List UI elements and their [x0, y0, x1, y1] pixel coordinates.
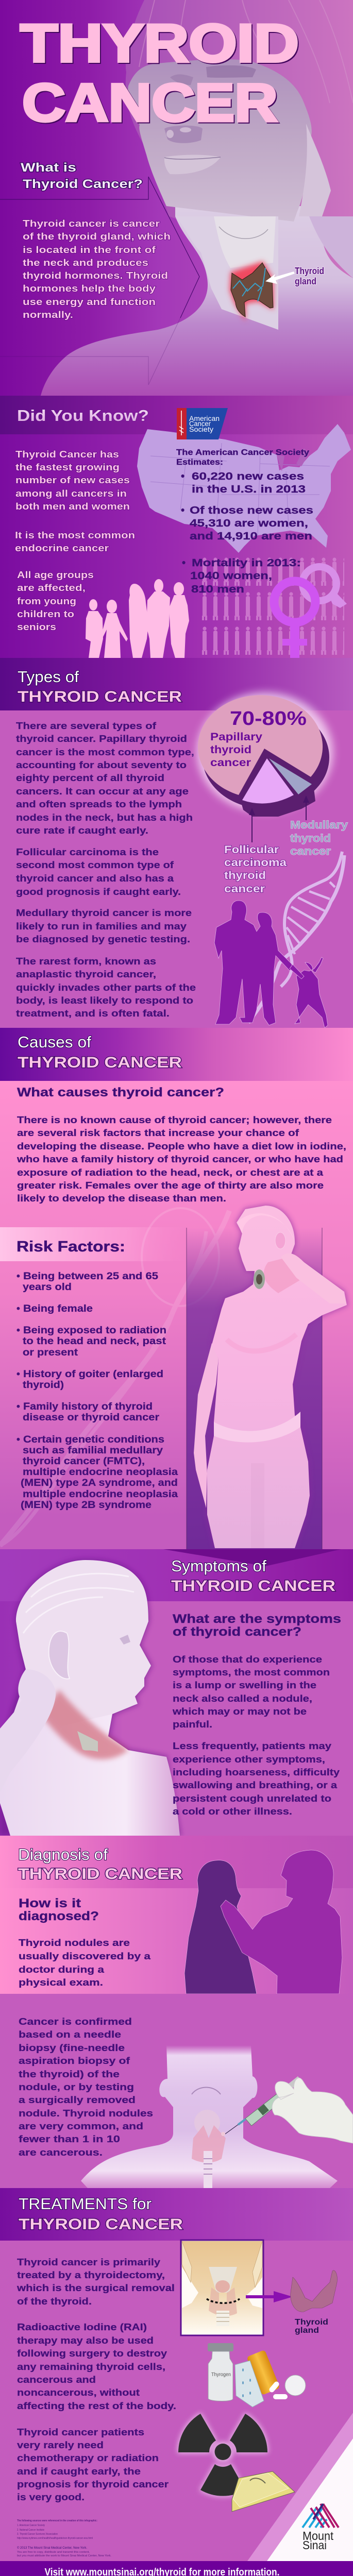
list: risk factors: • [16, 1303, 20, 1314]
text: biopsy explanation: Cancer is confirmed [19, 2016, 132, 2027]
text: American Cancer Society estimates: Estimates: [176, 458, 223, 467]
text: types description: Medullary thyroid cancer is more [16, 907, 192, 918]
text: radioactive iodine: cancerous and [17, 2374, 96, 2385]
panel: biopsy [0, 1994, 353, 2188]
illustration: yellow booklet [232, 2471, 295, 2512]
label: follicular carcinoma: cancer [224, 883, 265, 895]
decoration: faint DNA behind risk list [0, 1208, 229, 1546]
label: thyroid gland: gland [295, 276, 316, 286]
text: copyright [17, 2546, 111, 2557]
heading: what is thyroid cancer [21, 161, 143, 191]
label: thyroid gland: gland [295, 2326, 319, 2335]
text: other symptoms: Less frequently, patients may [173, 1740, 332, 1751]
text: types description [16, 720, 196, 1019]
text: biopsy explanation: aspiration biopsy of [19, 2055, 130, 2066]
arrow: thyroid gland pointer [265, 272, 295, 284]
text: definition [23, 218, 171, 320]
text: causes description: likely to develop the disease than men. [17, 1193, 226, 1204]
illustration: head in profile with neck pain [0, 1560, 180, 1836]
text: sources: 3. Thyroid Cancer Survivors' Association [17, 2533, 58, 2536]
text: thyroidectomy: which is the surgical removal [16, 2282, 175, 2293]
text: fastest growing: Thyroid Cancer has [15, 449, 119, 460]
list: risk factors: multiple endocrine neoplasia [23, 1466, 178, 1478]
text: sources: The following sources were referenced in the creation of this infographic: [17, 2519, 97, 2522]
heading: did you know: Did You Know? [17, 406, 149, 425]
label: follicular carcinoma [224, 844, 287, 895]
label: medullary thyroid cancer [290, 819, 348, 857]
logo: American Cancer Society [177, 408, 228, 439]
text: biopsy explanation: fewer than 1 in 10 [19, 2133, 120, 2144]
pie chart: thyroid cancer types [197, 692, 333, 817]
text: most common endocrine cancer [15, 530, 135, 553]
text: types description: Follicular carcinoma is the [16, 846, 159, 857]
illustration: medication vial and pills: Thyrogen [211, 2372, 231, 2378]
text: causes description: exposure of radiation to the head, neck, or chest are at a [17, 1167, 324, 1178]
question: what causes: What causes thyroid cancer? [17, 1086, 224, 1099]
text: types description: body, is least likely to respond to [16, 995, 193, 1006]
heading: diagnosis: THYROID CANCER [18, 1866, 182, 1883]
question: what are the symptoms [173, 1612, 341, 1639]
text: definition: of the thyroid gland, which [23, 231, 171, 242]
illustration: neck and shoulders [81, 2045, 338, 2188]
text: all age groups: All age groups [17, 569, 94, 580]
text: types description: eighty percent of all thyroid [16, 772, 164, 783]
list: risk factors: to the head and neck, past [23, 1335, 166, 1347]
text: types description: There are several types of [16, 720, 157, 731]
title [20, 13, 299, 133]
text: types description: cancers. It can occur at any age [16, 786, 189, 796]
text: sources: http://www.nytimes.com/health/healthguide/esn-thyroid-cancer-ess.html [17, 2537, 93, 2540]
list: risk factors: History of goiter (enlarged [23, 1368, 163, 1380]
question: how is it diagnosed [19, 1896, 99, 1923]
text: types description: cure rate if caught early. [16, 825, 148, 836]
heading: symptoms: THYROID CANCER [171, 1578, 335, 1595]
text: definition: Thyroid cancer is cancer [23, 218, 160, 229]
text: discovery: doctor during a [19, 1964, 105, 1975]
list: risk factors: Being exposed to radiation [23, 1325, 166, 1336]
illustration: woman with hand on neck [194, 1206, 347, 1548]
text: American Cancer Society estimates: • [182, 557, 186, 569]
logo: American Cancer Society: American [189, 415, 220, 422]
illustration: DNA helix [248, 852, 344, 1023]
list: risk factors: thyroid) [23, 1379, 64, 1391]
text: biopsy explanation [19, 2016, 153, 2158]
heading: types: THYROID CANCER [18, 688, 182, 705]
icon: female symbol [274, 581, 315, 658]
text: fastest growing: number of new cases [15, 474, 130, 485]
text: thyroidectomy: Thyroid cancer is primarily [17, 2257, 161, 2267]
text: copyright: but you must attribute the work to Mount Sinai Medical Center, New York. [17, 2554, 111, 2557]
text: types description: cancer is the most common type, [16, 747, 194, 757]
text: most common symptom: is a lump or swelling in the [173, 1680, 316, 1690]
list: risk factors: thyroid cancer (FMTC), [23, 1455, 145, 1467]
label: thyroid gland [295, 2318, 328, 2335]
logo: Mount Sinai: Sinai [302, 2538, 327, 2552]
silhouette: patient [184, 1860, 257, 1994]
text: other symptoms: swallowing and breathing, or a [173, 1780, 338, 1790]
text: copyright: You are free to copy, distribute and transmit this content, [17, 2551, 90, 2554]
text: most common symptom: neck also called a nodule, [173, 1693, 312, 1704]
illustration: removed thyroid gland [291, 2270, 337, 2312]
heading: what is thyroid cancer: Thyroid Cancer? [23, 177, 143, 191]
panel: woman figure backdrop [187, 1228, 322, 1549]
text: American Cancer Society estimates [176, 448, 313, 595]
text: types description: be diagnosed by genetic testing. [16, 934, 190, 944]
text: American Cancer Society estimates: in the U.S. in 2013 [192, 483, 306, 495]
list: risk factors: • [16, 1434, 20, 1445]
text: definition: hormones help the body [23, 283, 156, 294]
text: types description: accounting for about seventy to [16, 759, 187, 770]
text: discovery: usually discovered by a [19, 1951, 151, 1961]
text: fastest growing [15, 449, 130, 512]
text: American Cancer Society estimates: 60,220 new cases [192, 470, 304, 482]
text: most common endocrine cancer: It is the most common [15, 530, 135, 540]
text: discovery [19, 1937, 151, 1988]
text: American Cancer Society estimates: 1040 women, [190, 570, 272, 582]
text: American Cancer Society estimates: 810 men [191, 583, 244, 595]
text: American Cancer Society estimates: • [181, 504, 184, 516]
label: thyroid gland: Thyroid [295, 266, 324, 276]
text: biopsy explanation: the thyroid) of the [19, 2069, 120, 2079]
text: types description: second most common type of [16, 859, 174, 870]
text: American Cancer Society estimates: and 14,910 are men [190, 530, 312, 542]
list: risk factors: disease or thyroid cancer [23, 1412, 159, 1423]
text: types description: good prognosis if caught early. [16, 886, 181, 897]
text: discovery: Thyroid nodules are [19, 1937, 130, 1948]
arrow: surgery to removed gland [246, 2291, 293, 2302]
question: what are the symptoms: of thyroid cancer? [173, 1625, 301, 1639]
arrow: follicular [249, 808, 255, 842]
text: all age groups: children to [17, 608, 74, 619]
text: other symptoms: experience other symptoms, [173, 1754, 325, 1765]
text: thyroidectomy: treated by a thyroidectomy, [17, 2269, 165, 2280]
text: most common symptom: Of those that do experience [173, 1654, 322, 1665]
text: biopsy explanation: are very common, and [19, 2121, 143, 2131]
heading: diagnosis: Diagnosis of [18, 1845, 108, 1863]
silhouette: family [214, 901, 328, 1028]
pie value and label: Papillary [210, 731, 262, 743]
text: definition: is located in the front of [23, 244, 156, 255]
illustration: syringe [221, 2076, 301, 2136]
text: fastest growing: among all cancers in [15, 488, 127, 499]
list: risk factors: years old [23, 1281, 72, 1293]
list: risk factors: • [16, 1368, 20, 1380]
list: risk factors: (MEN) type 2A syndrome, and [21, 1477, 178, 1488]
text: causes description: There is no known cause of thyroid cancer; however, there [17, 1114, 332, 1125]
text: sources: 1. American Cancer Society [17, 2524, 45, 2527]
text: discovery: physical exam. [19, 1977, 103, 1988]
text: most common symptom: painful. [173, 1719, 212, 1730]
panel: diagnosis of thyroid cancer [0, 1836, 353, 1994]
text: radioactive iodine [17, 2321, 176, 2411]
text: prognosis: prognosis for thyroid cancer [17, 2479, 169, 2489]
map of the United States [137, 424, 351, 553]
text: American Cancer Society estimates: 45,310 are women, [190, 517, 308, 529]
text: radioactive iodine: noncancerous, without [17, 2387, 140, 2398]
text: definition: thyroid hormones. Thyroid [23, 270, 168, 281]
heading: diagnosis [18, 1845, 182, 1883]
text: radioactive iodine: Radioactive Iodine (RAI) [17, 2321, 147, 2332]
text: all age groups: from young [17, 596, 76, 606]
illustration: woman's head and neck [41, 0, 353, 396]
text: types description: nodes in the neck, but has a high [16, 812, 193, 823]
illustration: thyroid gland [231, 263, 273, 317]
heading: causes: Causes of [18, 1033, 91, 1051]
list: risk factors: (MEN) type 2B syndrome [21, 1499, 152, 1511]
text: types description: anaplastic thyroid cancer, [16, 969, 156, 979]
text: American Cancer Society estimates: Of those new cases [190, 504, 313, 516]
panel: what is thyroid cancer [0, 0, 353, 396]
label: follicular carcinoma: Follicular [224, 844, 279, 856]
text: copyright: © 2013 The Mount Sinai Medical Center, New York. [17, 2546, 87, 2550]
pie value and label: cancer [210, 757, 251, 769]
heading: treatments: TREATMENTS for [19, 2195, 152, 2213]
illustration: medication vial and pills [208, 2343, 306, 2407]
text: all age groups: seniors [17, 621, 56, 632]
text: types description: likely to run in families and may [16, 921, 187, 931]
text: American Cancer Society estimates: The American Cancer Society [176, 448, 309, 457]
text: types description: thyroid cancer and also has a [16, 873, 174, 884]
text: prognosis: Thyroid cancer patients [17, 2427, 144, 2437]
heading: types: Types of [18, 668, 79, 686]
pie value and label [210, 708, 307, 769]
text: most common symptom [172, 1654, 330, 1730]
panel: symptoms of thyroid cancer [0, 1549, 353, 1836]
pie value and label: thyroid [210, 744, 251, 756]
text: biopsy explanation: biopsy (fine-needle [19, 2042, 125, 2053]
text: prognosis: is very good. [17, 2492, 85, 2502]
label: follicular carcinoma: thyroid [224, 870, 266, 882]
illustration: gloved hand [272, 2078, 353, 2143]
footer: call to action [0, 2561, 353, 2576]
text: prognosis: very rarely need [17, 2439, 104, 2450]
text: radioactive iodine: affecting the rest of the body. [17, 2400, 176, 2411]
label: thyroid gland [295, 266, 324, 286]
text: thyroidectomy [16, 2257, 175, 2307]
question: what are the symptoms: What are the symptoms [173, 1612, 341, 1626]
text: thyroidectomy: of the thyroid. [17, 2296, 92, 2307]
text: American Cancer Society estimates: • [181, 470, 184, 482]
heading: what is thyroid cancer: What is [21, 161, 76, 175]
family silhouette: all age groups [86, 579, 189, 658]
list: risk factors: Family history of thyroid [23, 1401, 153, 1412]
text: types description: quickly invades other parts of the [16, 982, 196, 993]
text: prognosis: and if caught early, the [17, 2466, 141, 2477]
title: CANCER [22, 73, 278, 133]
corner: light and white diagonal bands [247, 2413, 353, 2561]
heading: symptoms: Symptoms of [171, 1557, 266, 1575]
list: risk factors: • [16, 1401, 20, 1412]
text: causes description: who have a family history of thyroid cancer, or who have had [16, 1154, 343, 1164]
list: risk factors: Being between 25 and 65 [23, 1270, 158, 1282]
logo: American Cancer Society: Society [189, 426, 213, 433]
callout shape [0, 177, 199, 385]
icon: male symbol [302, 567, 347, 608]
text: biopsy explanation: nodule, or by testing [19, 2081, 134, 2092]
text: radioactive iodine: any remaining thyroid cells, [17, 2361, 165, 2372]
text: types description: treatment, and is often fatal. [16, 1008, 170, 1019]
text: causes description [16, 1114, 346, 1204]
list: risk factors: or present [23, 1347, 78, 1358]
text: sources: 2. National Cancer Institute [17, 2529, 44, 2532]
text: other symptoms: including hoarseness, difficulty [173, 1767, 340, 1777]
heading: risk factors: Risk Factors: [16, 1239, 125, 1255]
label: follicular carcinoma: carcinoma [224, 857, 287, 869]
question: how is it diagnosed: How is it [19, 1896, 81, 1910]
text: all age groups [17, 569, 94, 632]
label: medullary thyroid cancer: Medullary [290, 819, 348, 831]
panel: types of thyroid cancer [0, 658, 353, 1028]
icon: radiation trefoil [178, 2414, 267, 2496]
list: risk factors: • [16, 1325, 20, 1336]
text: biopsy explanation: a surgically removed [19, 2094, 136, 2105]
list: risk factors [16, 1270, 178, 1511]
list: risk factors: multiple endocrine neoplasia [23, 1488, 178, 1500]
text: types description: thyroid cancer. Papillary thyroid [16, 733, 187, 744]
text: causes description: are several risk factors that increase your chance of [17, 1127, 299, 1138]
question: how is it diagnosed: diagnosed? [19, 1909, 99, 1923]
heading: causes [18, 1033, 182, 1071]
heading: causes: THYROID CANCER [18, 1054, 182, 1071]
logo: Mount Sinai [302, 2504, 339, 2552]
text: most common symptom: symptoms, the most common [173, 1667, 330, 1677]
list: risk factors: • [16, 1270, 20, 1282]
text: biopsy explanation: nodule. Thyroid nodules [19, 2108, 153, 2119]
text: definition: use energy and function [23, 296, 156, 307]
heading: treatments: THYROID CANCER [19, 2216, 183, 2233]
list: risk factors: Being female [23, 1303, 93, 1314]
text: biopsy explanation: based on a needle [19, 2029, 121, 2040]
text: prognosis: chemotherapy or radiation [17, 2452, 159, 2463]
title: THYROID [20, 13, 299, 73]
text: radioactive iodine: following surgery to destroy [17, 2348, 167, 2359]
text: radioactive iodine: therapy may also be used [17, 2335, 154, 2346]
text: fastest growing: the fastest growing [15, 462, 120, 472]
logo: American Cancer Society: Cancer [189, 420, 211, 428]
list: risk factors: such as familial medullary [23, 1445, 163, 1456]
label: thyroid gland: Thyroid [295, 2318, 328, 2327]
panel: did you know [0, 396, 353, 658]
text: definition: normally. [23, 309, 73, 320]
text: sources [17, 2519, 97, 2540]
text: definition: the neck and produces [23, 257, 148, 268]
text: most common symptom: which may or may not be [172, 1706, 307, 1717]
text: types description: The rarest form, known as [16, 956, 156, 967]
text: causes description: greater risk. Females over the age of thirty are also more [17, 1180, 324, 1191]
arrow: medullary [303, 795, 309, 820]
text: types description: and often spreads to the lymph [16, 799, 182, 809]
text: other symptoms: persistent cough unrelated to [173, 1793, 331, 1804]
label: medullary thyroid cancer: thyroid [290, 833, 331, 844]
text: American Cancer Society estimates: Mortality in 2013: [192, 557, 301, 569]
heading: types [18, 668, 182, 705]
text: prognosis [17, 2427, 169, 2502]
list: risk factors: Certain genetic conditions [23, 1434, 164, 1445]
heading: treatments [19, 2195, 183, 2233]
text: all age groups: are affected, [17, 582, 86, 593]
label: medullary thyroid cancer: cancer [290, 845, 331, 857]
logo: Mount Sinai: Mount [302, 2529, 334, 2543]
text: fastest growing: both men and women [15, 501, 130, 512]
text: causes description: developing the disease. People who have a diet low in iodine, [17, 1141, 346, 1151]
faded rows of people [199, 557, 344, 658]
panel: causes of thyroid cancer [0, 1028, 353, 1549]
heading: symptoms [171, 1557, 335, 1595]
pie value and label: 70-80% [230, 708, 307, 730]
illustration: thyroidectomy neck diagram [181, 2240, 263, 2335]
text: biopsy explanation: are cancerous. [19, 2147, 103, 2158]
text: most common endocrine cancer: endocrine cancer [15, 543, 109, 553]
text: other symptoms: a cold or other illness. [173, 1806, 292, 1817]
text: other symptoms [173, 1740, 340, 1817]
panel: treatments for thyroid cancer [0, 2188, 353, 2561]
silhouette: doctor [221, 1850, 342, 1994]
